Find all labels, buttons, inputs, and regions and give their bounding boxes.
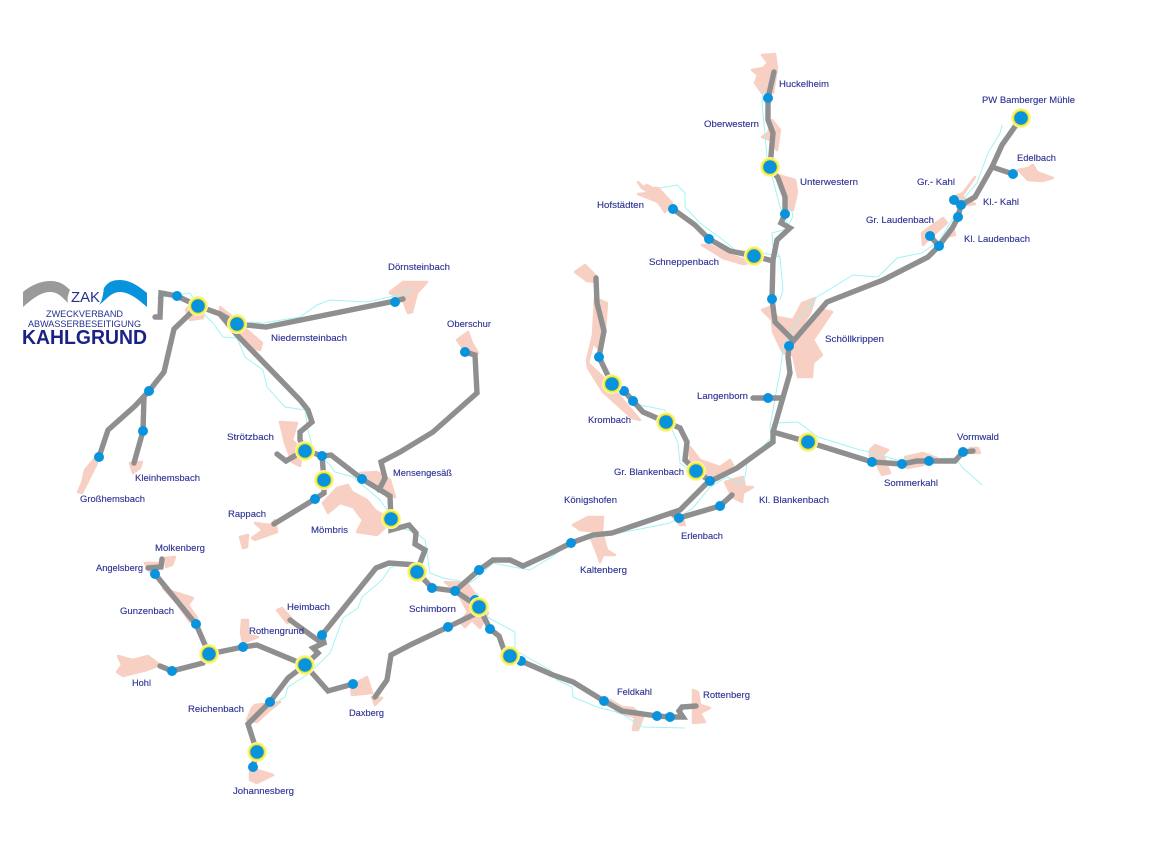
- village areas: [78, 54, 1053, 783]
- label: Hofstädten: Hofstädten: [597, 200, 644, 211]
- label: Angelsberg: Angelsberg: [96, 563, 143, 574]
- streams: [157, 87, 1002, 728]
- label: Edelbach: Edelbach: [1017, 153, 1056, 164]
- logo text: Zweckverband: ZWECKVERBAND: [46, 309, 123, 320]
- label: Oberschur: Oberschur: [447, 319, 491, 330]
- label: Schöllkrippen: Schöllkrippen: [825, 334, 884, 345]
- label: Erlenbach: Erlenbach: [681, 531, 723, 542]
- label: Hohl: Hohl: [132, 678, 151, 689]
- label: Strötzbach: Strötzbach: [227, 432, 274, 443]
- logo text: ZAK: ZAK: [71, 289, 100, 306]
- label: Krombach: Krombach: [588, 415, 631, 426]
- label: Kleinhemsbach: Kleinhemsbach: [135, 473, 200, 484]
- label: Sommerkahl: Sommerkahl: [884, 478, 938, 489]
- label: Rottenberg: Rottenberg: [703, 690, 750, 701]
- label: Gunzenbach: Gunzenbach: [120, 606, 174, 617]
- label: Feldkahl: Feldkahl: [617, 687, 652, 698]
- label: Mömbris: Mömbris: [311, 525, 348, 536]
- label: Schimborn: Schimborn: [409, 604, 456, 615]
- logo icon: blue wave: [99, 280, 147, 307]
- label: Rothengrund: Rothengrund: [249, 626, 304, 637]
- large stations with yellow ring: [188, 108, 1031, 762]
- label: Reichenbach: Reichenbach: [188, 704, 244, 715]
- label: Molkenberg: Molkenberg: [155, 543, 205, 554]
- label: Huckelheim: Huckelheim: [779, 79, 829, 90]
- label: Daxberg: Daxberg: [349, 708, 384, 719]
- label: Vormwald: Vormwald: [957, 432, 999, 443]
- label: Dörnsteinbach: Dörnsteinbach: [388, 262, 450, 273]
- label: Gr. Laudenbach: Gr. Laudenbach: [866, 215, 934, 226]
- label: Schneppenbach: Schneppenbach: [649, 257, 719, 268]
- label: Rappach: Rappach: [228, 509, 266, 520]
- label: Kaltenberg: Kaltenberg: [580, 565, 627, 576]
- label: Niedernsteinbach: Niedernsteinbach: [271, 333, 347, 344]
- label: Kl. Blankenbach: Kl. Blankenbach: [759, 495, 829, 506]
- label: Heimbach: Heimbach: [287, 602, 330, 613]
- small pumping stations: [94, 93, 1018, 772]
- label: Johannesberg: Johannesberg: [233, 786, 294, 797]
- logo text: Kahlgrund: KAHLGRUND: [22, 327, 147, 349]
- label: PW Bamberger Mühle: PW Bamberger Mühle: [982, 95, 1075, 106]
- label: Oberwestern: Oberwestern: [704, 119, 759, 130]
- sewer pipelines: [99, 72, 1021, 767]
- label: Gr.- Kahl: Gr.- Kahl: [917, 177, 955, 188]
- label: Unterwestern: Unterwestern: [800, 177, 858, 188]
- label: Gr. Blankenbach: Gr. Blankenbach: [614, 467, 684, 478]
- label: Kl.- Kahl: Kl.- Kahl: [983, 197, 1019, 208]
- logo text: Abwasserbeseitigung: ABWASSERBESEITIGUNG: [28, 319, 141, 330]
- label: Mensengesäß: Mensengesäß: [393, 468, 452, 479]
- logo: ZAK Kahlgrund: [22, 280, 147, 349]
- label: Großhemsbach: Großhemsbach: [80, 494, 145, 505]
- logo icon: grey wave: [23, 281, 70, 307]
- label: Langenborn: Langenborn: [697, 391, 748, 402]
- place name labels: [80, 79, 1075, 797]
- label: Königshofen: Königshofen: [564, 495, 617, 506]
- label: Kl. Laudenbach: Kl. Laudenbach: [964, 234, 1030, 245]
